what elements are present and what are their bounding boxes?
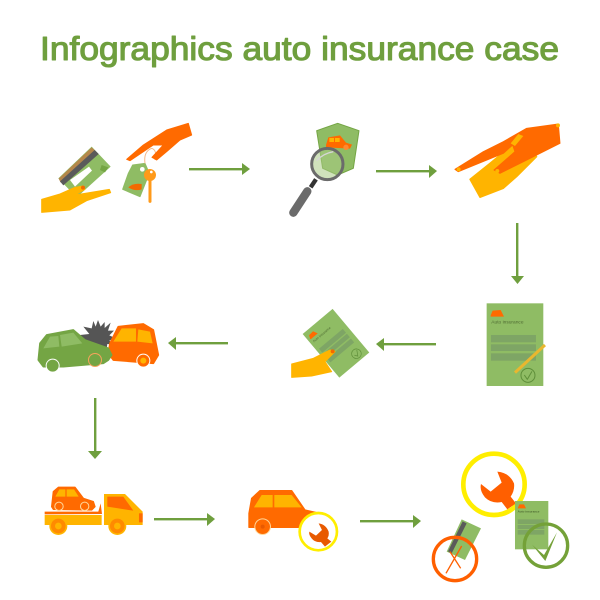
result group <box>433 454 568 581</box>
car on truck <box>52 487 95 511</box>
shield car <box>326 135 352 150</box>
truck bed <box>45 503 102 525</box>
yellow hand <box>470 137 537 197</box>
key tag <box>123 163 149 197</box>
car <box>249 491 317 535</box>
arrow 4 <box>376 338 436 351</box>
arrow 6 <box>88 398 102 459</box>
orange hand <box>455 124 560 173</box>
orange cross circle <box>433 537 477 581</box>
icon: hands exchanging card and keys <box>42 123 192 212</box>
arrow 1 <box>189 163 250 175</box>
tow truck and car <box>45 487 143 535</box>
arrow 3 <box>511 223 524 284</box>
hand holding document <box>292 309 369 378</box>
insurance document with pen <box>487 303 545 386</box>
document page <box>487 303 543 386</box>
yellow circle with wrench <box>463 454 525 515</box>
yellow thumb and fingertips <box>457 123 560 173</box>
document heading: Auto insurance <box>491 319 524 325</box>
title: Infographics auto insurance case <box>40 30 559 67</box>
card <box>447 519 481 560</box>
yellow hand <box>42 186 111 212</box>
car crash <box>38 320 158 373</box>
arrow 7 <box>154 513 215 526</box>
document car <box>491 310 504 317</box>
document: Auto insurance <box>518 509 540 513</box>
text lines <box>491 335 536 361</box>
green check circle <box>524 524 568 567</box>
car with wrench badge <box>249 491 337 550</box>
bank card <box>58 147 111 197</box>
burst <box>80 320 115 348</box>
wrench badge <box>300 513 337 550</box>
check mark <box>521 368 535 382</box>
arrow 2 <box>376 165 437 178</box>
truck wheels <box>49 517 126 535</box>
green car <box>38 330 112 373</box>
magnifier <box>293 148 343 213</box>
shield <box>317 123 359 175</box>
icon: handshake <box>455 123 560 197</box>
key <box>144 148 156 201</box>
orange car <box>108 324 158 368</box>
pen <box>515 345 545 373</box>
orange hand <box>127 123 192 161</box>
document: Auto insurance <box>312 326 332 343</box>
icon: shield with magnifier <box>293 123 359 213</box>
arrow 8 <box>360 515 421 528</box>
arrow 5 <box>168 337 228 350</box>
yellow hand <box>292 350 335 377</box>
truck cab <box>104 494 143 525</box>
